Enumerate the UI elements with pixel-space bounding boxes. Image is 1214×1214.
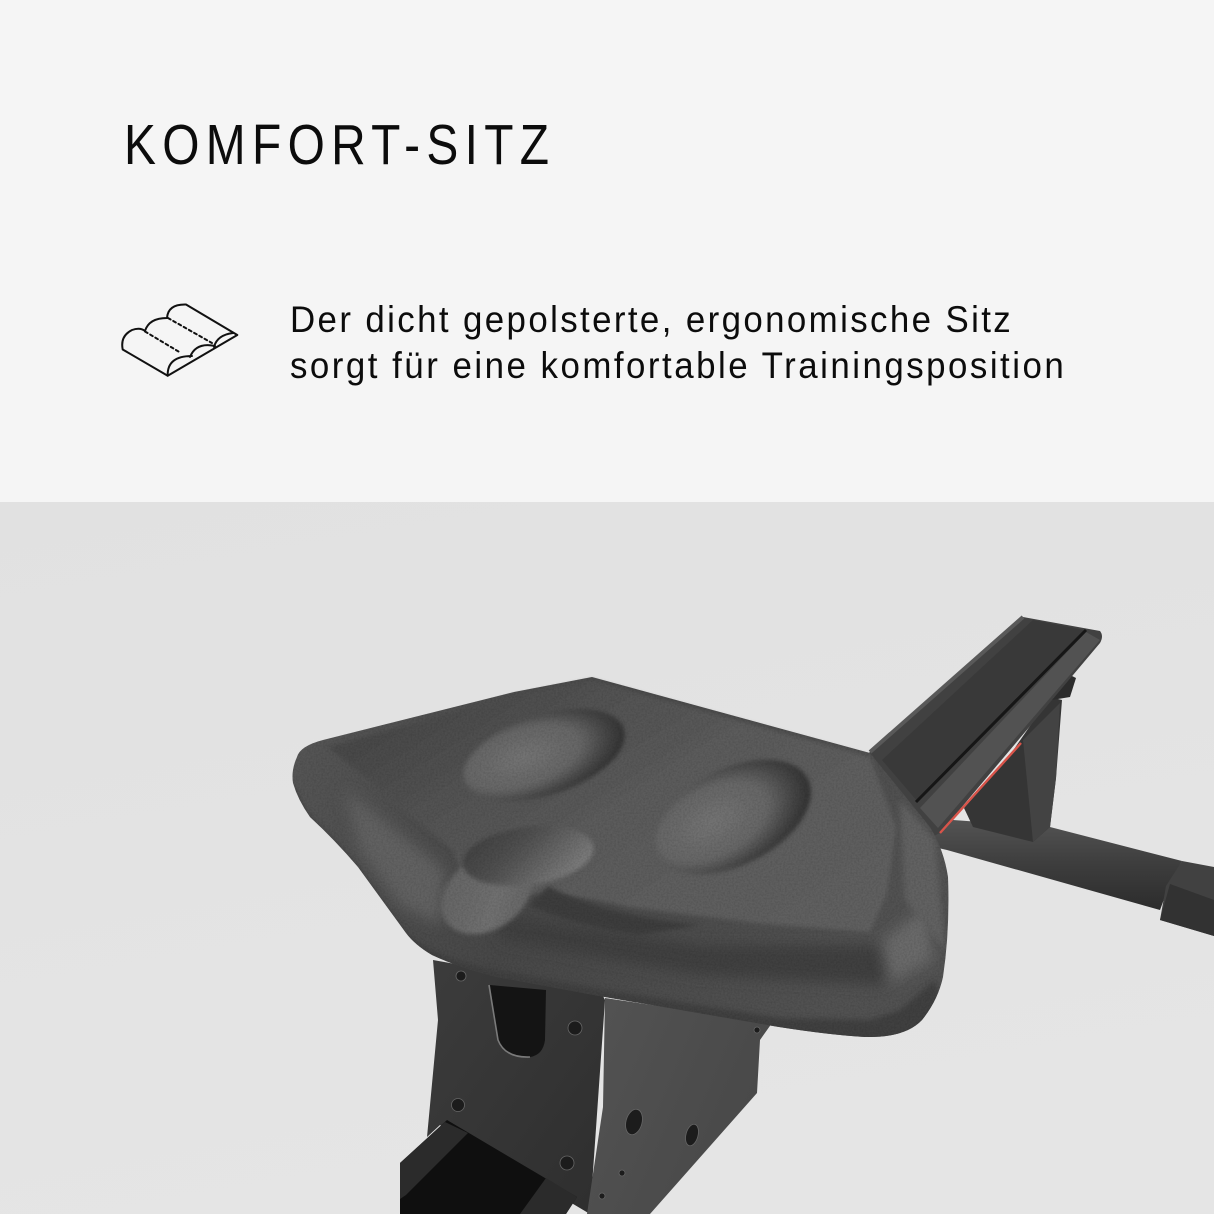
icon: padded seat cushion	[122, 304, 237, 376]
upper text background	[0, 0, 1214, 502]
seat surface grain	[285, 670, 955, 1045]
seat pommel	[425, 818, 700, 951]
seat top surface	[328, 680, 896, 932]
description text	[290, 298, 1064, 386]
red stripe	[940, 743, 1021, 833]
rear crossbar foot	[925, 815, 1214, 936]
seat	[292, 677, 948, 1037]
description text: sorgt für eine komfortable Trainingsposition	[290, 344, 1064, 386]
rear support block	[964, 675, 1076, 842]
title: KOMFORT-SITZ	[124, 113, 549, 177]
seat dimple right	[636, 736, 830, 898]
seat shell	[292, 677, 948, 1037]
seat dimple left	[452, 691, 636, 819]
seat bracket	[427, 960, 772, 1214]
bracket bolts	[452, 971, 760, 1199]
lower photo background	[0, 502, 1214, 1214]
rail	[860, 617, 1102, 840]
photo: rowing machine seat	[280, 617, 1214, 1214]
front black rail	[400, 1120, 577, 1214]
description text: Der dicht gepolsterte, ergonomische Sitz	[290, 298, 1011, 340]
